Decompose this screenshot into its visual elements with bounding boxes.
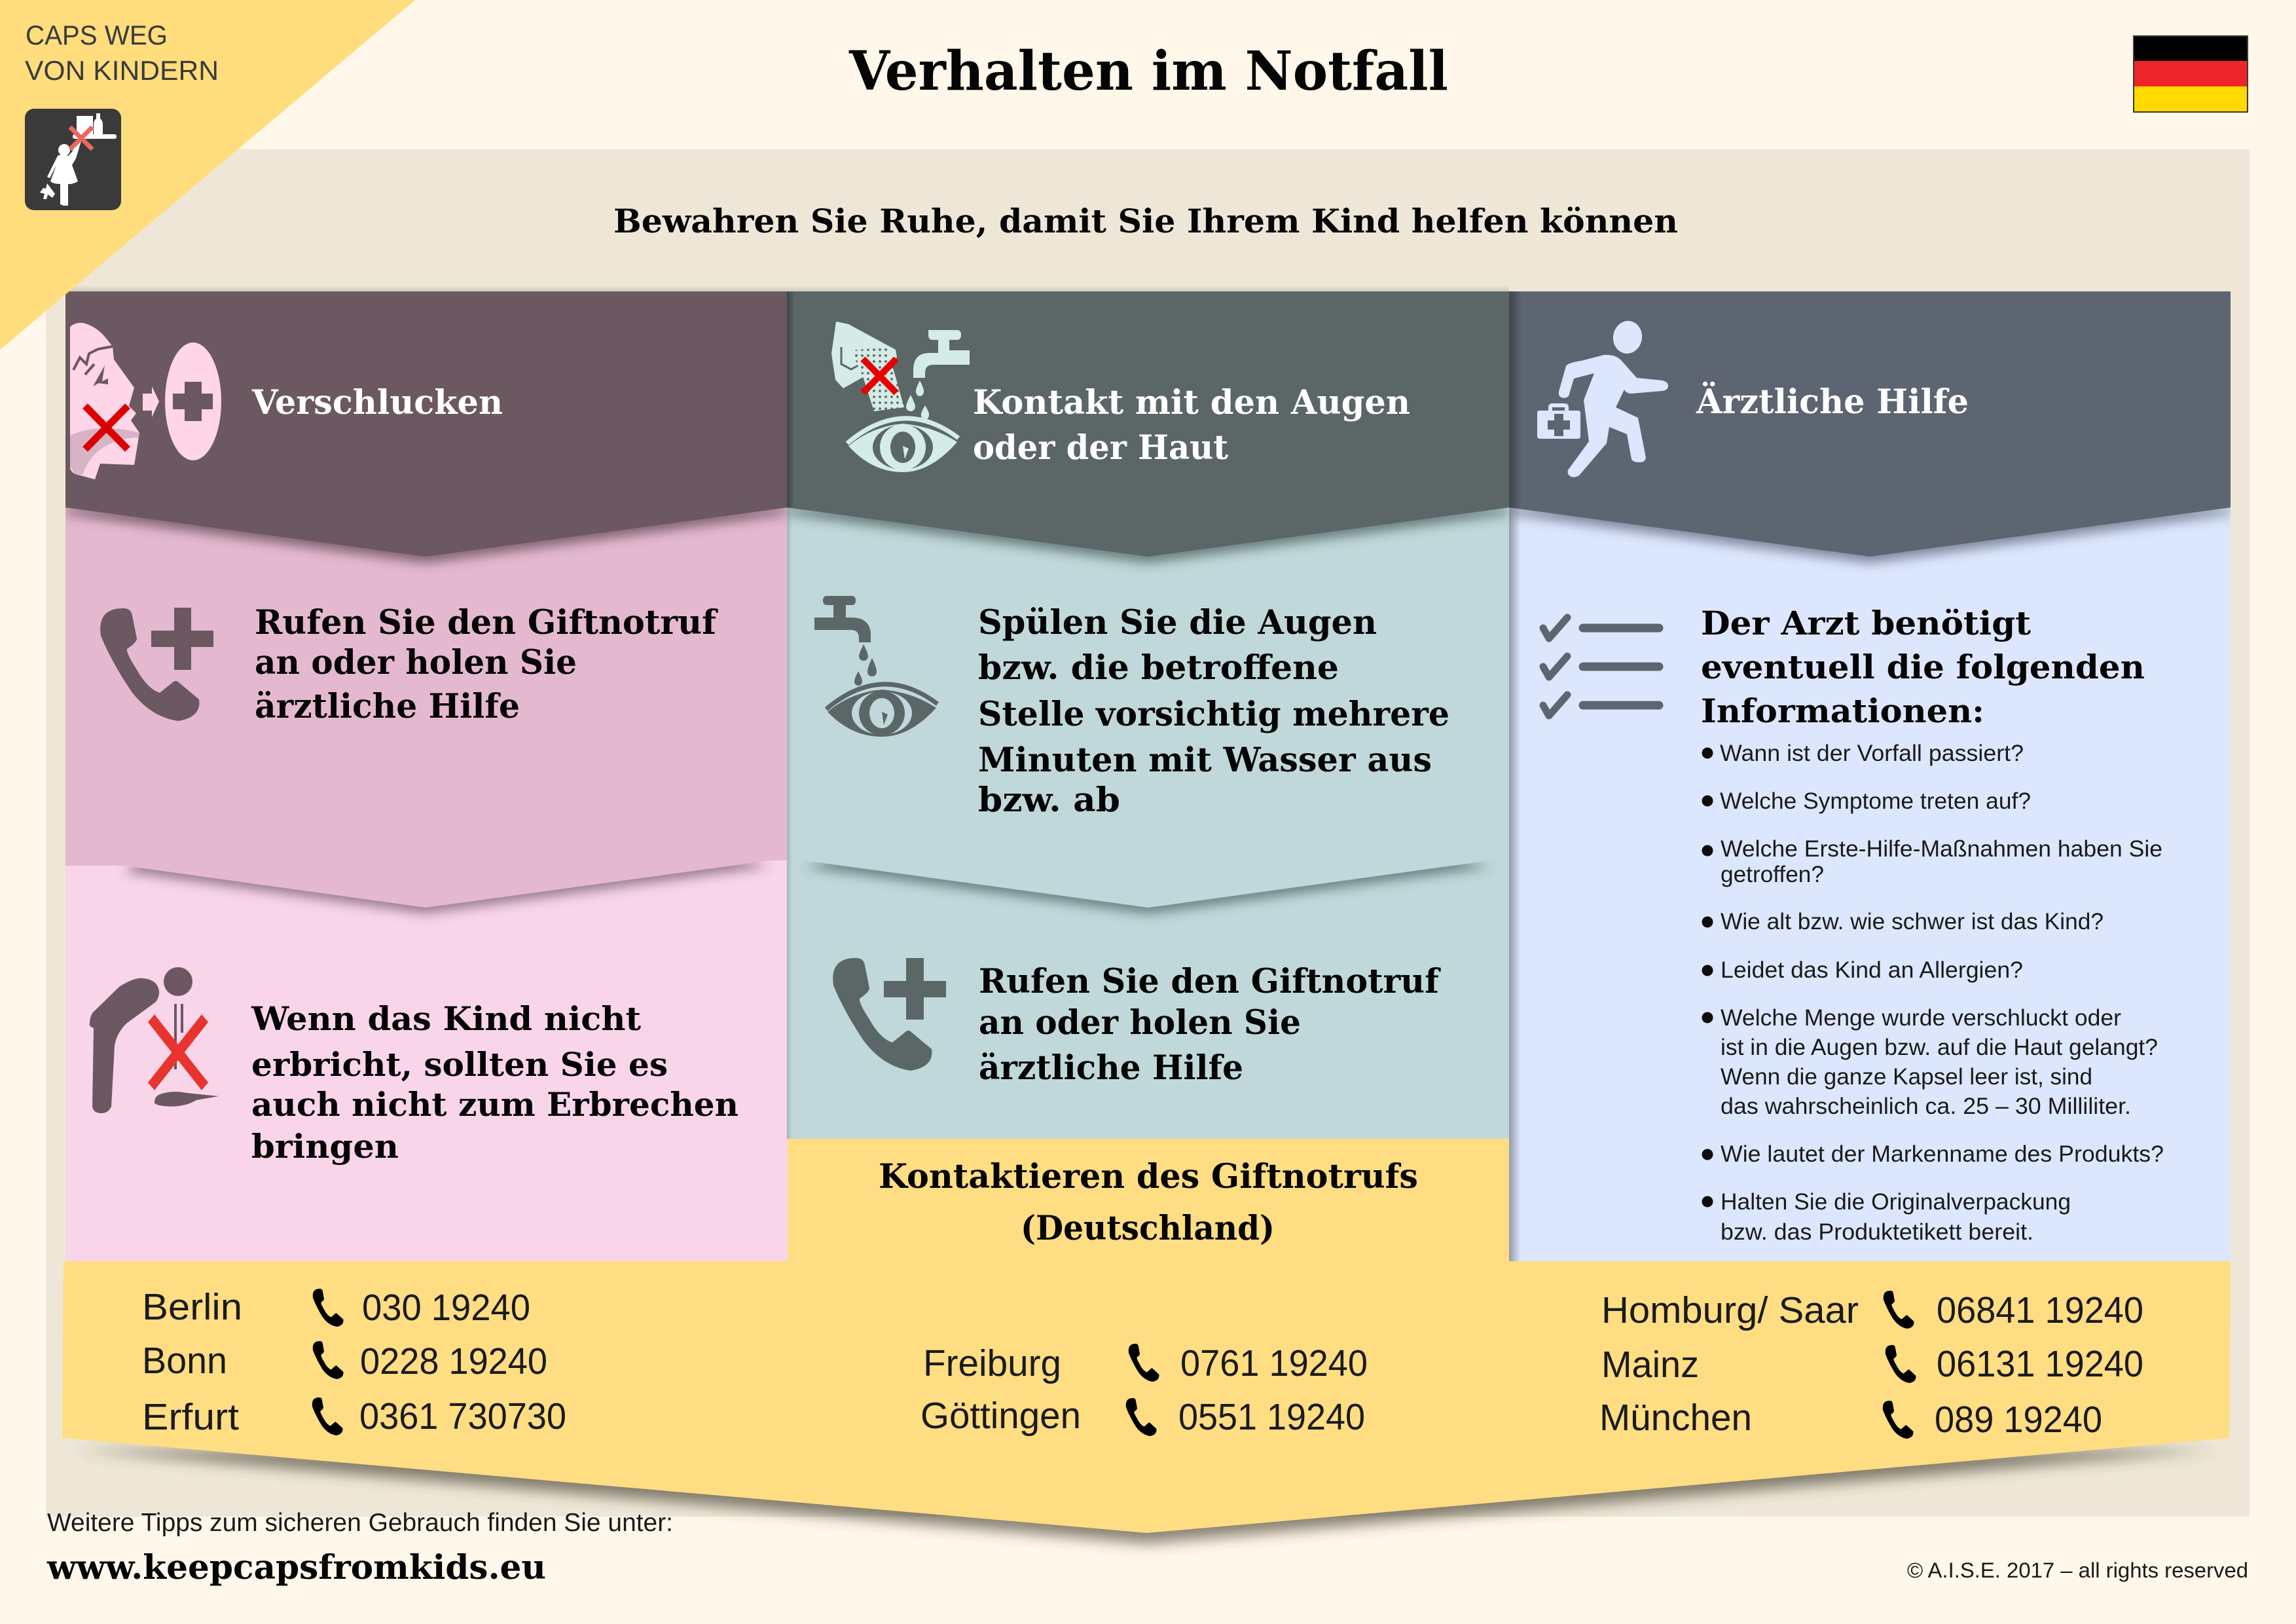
- icon: child reaching for shelf: [25, 109, 121, 210]
- heading: Kontaktieren des Giftnotrufs: [879, 1157, 1418, 1248]
- icon: person running with first aid kit: [1537, 319, 1668, 477]
- heading: Der Arzt benötigt: [1701, 604, 2145, 730]
- contacts: right group: 06841 19240: [1937, 1289, 2143, 1331]
- contacts: left group: Bonn: [142, 1340, 227, 1382]
- flag: Germany: [2133, 35, 2248, 113]
- heading: Ärztliche Hilfe: Ärztliche Hilfe: [1696, 382, 1969, 422]
- contacts: right group: [1599, 1289, 2143, 1441]
- icon: checklist: [1543, 618, 1659, 716]
- yellow bottom shadow: [75, 1450, 2216, 1543]
- list: information for doctor: Welche Menge wurde verschluckt oder: [1721, 1005, 2121, 1031]
- list: information for doctor: das wahrscheinlich ca. 25 – 30 Milliliter.: [1721, 1094, 2131, 1119]
- contacts: left group: 0228 19240: [360, 1340, 547, 1382]
- contacts: right group: 089 19240: [1935, 1399, 2102, 1441]
- list: information for doctor: bzw. das Produktetikett bereit.: [1721, 1219, 2033, 1245]
- header band: Verschlucken: [65, 291, 788, 557]
- copyright: © A.I.S.E. 2017 – all rights reserved: [1907, 1559, 2248, 1582]
- text: do not induce vomiting: erbricht, sollten Sie es: [251, 1045, 668, 1084]
- icon: phone with plus: [833, 958, 946, 1071]
- text: rinse eyes: bzw. ab: [978, 781, 1120, 820]
- list: information for doctor: Wie lautet der Markenname des Produkts?: [1721, 1141, 2164, 1167]
- corner banner: Caps weg von Kindern: [0, 0, 415, 350]
- list: information for doctor: Wenn die ganze Kapsel leer ist, sind: [1721, 1064, 2092, 1090]
- icon: child swallowing and medical cross: [70, 323, 221, 479]
- text: call poison centre: Rufen Sie den Giftnotruf: [255, 603, 718, 642]
- text: call poison centre: Rufen Sie den Giftnotruf: [979, 962, 1441, 1001]
- contacts: left group: Berlin: [142, 1286, 242, 1328]
- panel: Ärztliche Hilfe column: [1509, 291, 2231, 1261]
- text: rinse eyes: Minuten mit Wasser aus: [978, 741, 1432, 780]
- text: call poison centre: [255, 603, 718, 726]
- panel: Kontakt mit den Augen column: [787, 291, 1509, 1139]
- header band: Ärztliche Hilfe: [1509, 291, 2231, 557]
- text: do not induce vomiting: bringen: [251, 1127, 399, 1166]
- text: call poison centre: ärztliche Hilfe: [255, 687, 520, 726]
- panel: poison centre contacts: [62, 1139, 2231, 1533]
- heading: Der Arzt benötigt: Der Arzt benötigt: [1701, 604, 2031, 642]
- heading: Der Arzt benötigt: eventuell die folgenden: [1701, 648, 2145, 686]
- list: information for doctor: Wann ist der Vorfall passiert?: [1720, 741, 2024, 766]
- contacts: left group: [142, 1286, 566, 1438]
- text: campaign name: VON KINDERN: [25, 55, 219, 86]
- heading: Kontaktieren des Giftnotrufs: Kontaktieren des Giftnotrufs: [879, 1157, 1418, 1196]
- text: call poison centre: [979, 962, 1441, 1088]
- list: information for doctor: ist in die Augen bzw. auf die Haut gelangt?: [1721, 1035, 2158, 1060]
- contacts: left group: Erfurt: [142, 1396, 239, 1438]
- top shadow above columns: [65, 285, 1509, 291]
- contacts: right group: Homburg/ Saar: [1601, 1289, 1859, 1331]
- list: information for doctor: Welche Erste-Hilfe-Maßnahmen haben Sie: [1721, 836, 2162, 862]
- list: information for doctor: getroffen?: [1721, 862, 1824, 887]
- icon: phone with plus: [100, 608, 213, 721]
- contacts: right group: 06131 19240: [1937, 1343, 2143, 1385]
- heading: Kontaktieren des Giftnotrufs: (Deutschland): [1021, 1209, 1275, 1248]
- contacts: middle group: Freiburg: [923, 1342, 1061, 1384]
- text: call poison centre: an oder holen Sie: [255, 643, 577, 682]
- list: information for doctor: Halten Sie die Originalverpackung: [1721, 1189, 2071, 1215]
- text: rinse eyes: [978, 603, 1449, 820]
- heading: Kontakt mit den Augen oder der Haut: Kontakt mit den Augen: [973, 383, 1410, 422]
- list: information for doctor: Leidet das Kind an Allergien?: [1721, 957, 2023, 983]
- contacts: middle group: [920, 1342, 1368, 1438]
- list: information for doctor: Welche Symptome treten auf?: [1720, 788, 2031, 814]
- contacts: right group: Mainz: [1601, 1344, 1699, 1386]
- contacts: left group: 030 19240: [362, 1287, 530, 1329]
- contacts: right group: München: [1599, 1397, 1752, 1439]
- contacts: middle group: 0761 19240: [1180, 1342, 1368, 1384]
- list: information for doctor: Wie alt bzw. wie schwer ist das Kind?: [1721, 909, 2104, 934]
- contacts: middle group: 0551 19240: [1178, 1396, 1365, 1438]
- upper pink step: [65, 504, 788, 908]
- heading: Kontakt mit den Augen oder der Haut: [973, 383, 1410, 468]
- icon: do not induce vomiting: [90, 967, 219, 1113]
- text: rinse eyes: bzw. die betroffene: [978, 648, 1339, 688]
- heading: Kontakt mit den Augen oder der Haut: oder der Haut: [973, 428, 1228, 468]
- icon: tap rinsing eye: [814, 596, 938, 737]
- text: campaign name: CAPS WEG: [26, 20, 168, 50]
- text: call poison centre: ärztliche Hilfe: [979, 1048, 1243, 1088]
- text: do not induce vomiting: Wenn das Kind nicht: [251, 999, 641, 1038]
- text: rinse eyes: Stelle vorsichtig mehrere: [978, 695, 1449, 734]
- contacts: middle group: Göttingen: [920, 1395, 1081, 1437]
- icon: capsule, tap and eye: [831, 322, 970, 472]
- footer note: Weitere Tipps zum sicheren Gebrauch finden Sie unter:: [47, 1509, 673, 1537]
- text: do not induce vomiting: auch nicht zum Erbrechen: [251, 1085, 738, 1124]
- text: rinse eyes: Spülen Sie die Augen: [978, 603, 1377, 642]
- heading: Der Arzt benötigt: Informationen:: [1701, 692, 1984, 730]
- heading: Verschlucken: Verschlucken: [251, 383, 503, 422]
- subtitle: Bewahren Sie Ruhe, damit Sie Ihrem Kind helfen können: [613, 202, 1678, 240]
- text: call poison centre: an oder holen Sie: [979, 1003, 1301, 1043]
- header band: Kontakt: [787, 291, 1509, 557]
- panel: Verschlucken column: [65, 291, 788, 1261]
- list: information for doctor: [1702, 741, 2164, 1245]
- footer website: www.keepcapsfromkids.eu: [46, 1548, 546, 1587]
- text: do not induce vomiting: [251, 999, 738, 1166]
- text: campaign name: [25, 20, 219, 86]
- title: Verhalten im Notfall: [848, 40, 1448, 103]
- contacts: left group: 0361 730730: [359, 1395, 566, 1437]
